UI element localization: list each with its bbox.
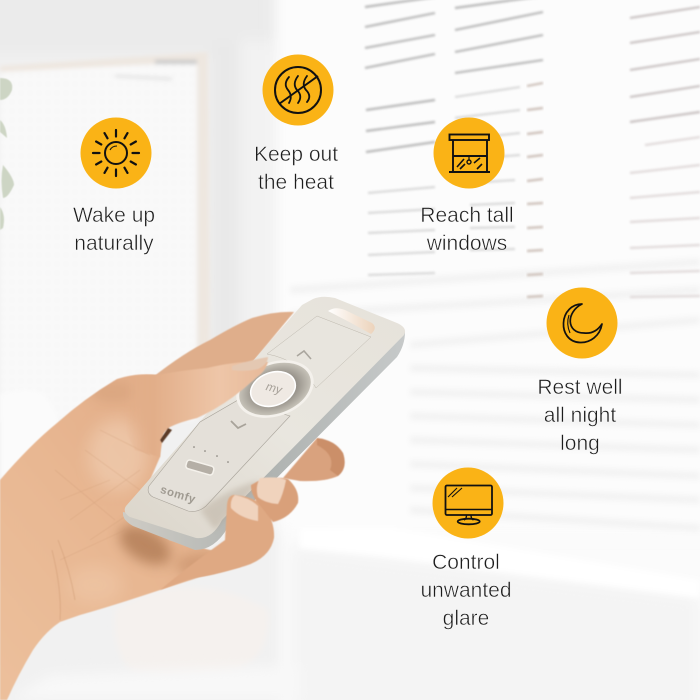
hand: front fingers bbox=[160, 477, 298, 590]
hand: thumb bbox=[110, 357, 268, 457]
label: wake up naturally: naturally bbox=[74, 232, 154, 255]
background: blind slat edges right column bbox=[630, 7, 700, 122]
remote control bbox=[123, 297, 405, 550]
background: blind slat edges middle column bbox=[455, 0, 543, 73]
icon: sun bbox=[80, 118, 152, 188]
remote: my wheel: my bbox=[264, 379, 285, 397]
remote: upper panel bbox=[267, 316, 371, 388]
feature: wake up naturally bbox=[73, 118, 155, 255]
background: blind slat edges short column bbox=[527, 83, 543, 297]
background: plant leaves bbox=[0, 78, 14, 230]
icon: window shade bbox=[434, 118, 504, 188]
label: rest well all night long: long bbox=[560, 432, 600, 455]
remote: lower panel bbox=[148, 400, 290, 511]
icon: monitor bbox=[432, 468, 504, 538]
icon: moon bbox=[546, 288, 618, 358]
background: blind slat edges left column faint bbox=[368, 187, 435, 275]
feature: keep out the heat bbox=[254, 54, 338, 194]
remote: my wheel bbox=[228, 350, 322, 428]
background: soft slat shadows bbox=[290, 262, 700, 528]
label: rest well all night long: all night bbox=[544, 404, 616, 427]
remote: hanging slot bbox=[328, 308, 375, 334]
background: blind slat edges left column bbox=[365, 0, 435, 152]
label: control unwanted glare: Control bbox=[432, 551, 500, 574]
hand: palm and wrist bbox=[0, 374, 267, 700]
background: bowl bbox=[115, 588, 268, 677]
icon: up arrow bbox=[297, 351, 311, 359]
hand: back fingers bbox=[153, 312, 345, 481]
label: keep out the heat: the heat bbox=[258, 171, 334, 194]
remote: side edge bbox=[123, 330, 405, 550]
feature: rest well all night long bbox=[537, 288, 623, 455]
label: reach tall windows: Reach tall bbox=[420, 204, 514, 227]
icon: no heat bbox=[262, 54, 334, 126]
label: control unwanted glare: unwanted bbox=[420, 579, 512, 602]
remote: selector button bbox=[185, 459, 215, 476]
icon: down arrow bbox=[231, 421, 246, 428]
feature: reach tall windows bbox=[420, 118, 514, 255]
label: control unwanted glare: glare bbox=[443, 607, 489, 630]
background: blind slat edges right column faint bbox=[630, 137, 700, 297]
remote: finger shadow bbox=[200, 480, 260, 530]
background: pillow bbox=[0, 390, 62, 480]
label: wake up naturally: Wake up bbox=[73, 204, 155, 227]
label: rest well all night long: Rest well bbox=[537, 376, 623, 399]
remote: top face bbox=[125, 297, 405, 538]
label: reach tall windows: windows bbox=[426, 232, 507, 255]
remote: indicator dots bbox=[193, 446, 229, 463]
background: blind slat edges middle column faint bbox=[455, 87, 520, 250]
remote: somfy logo: somfy bbox=[159, 484, 197, 506]
background: shelf bbox=[10, 665, 300, 700]
label: keep out the heat: Keep out bbox=[254, 143, 338, 166]
feature: control unwanted glare bbox=[420, 468, 512, 630]
